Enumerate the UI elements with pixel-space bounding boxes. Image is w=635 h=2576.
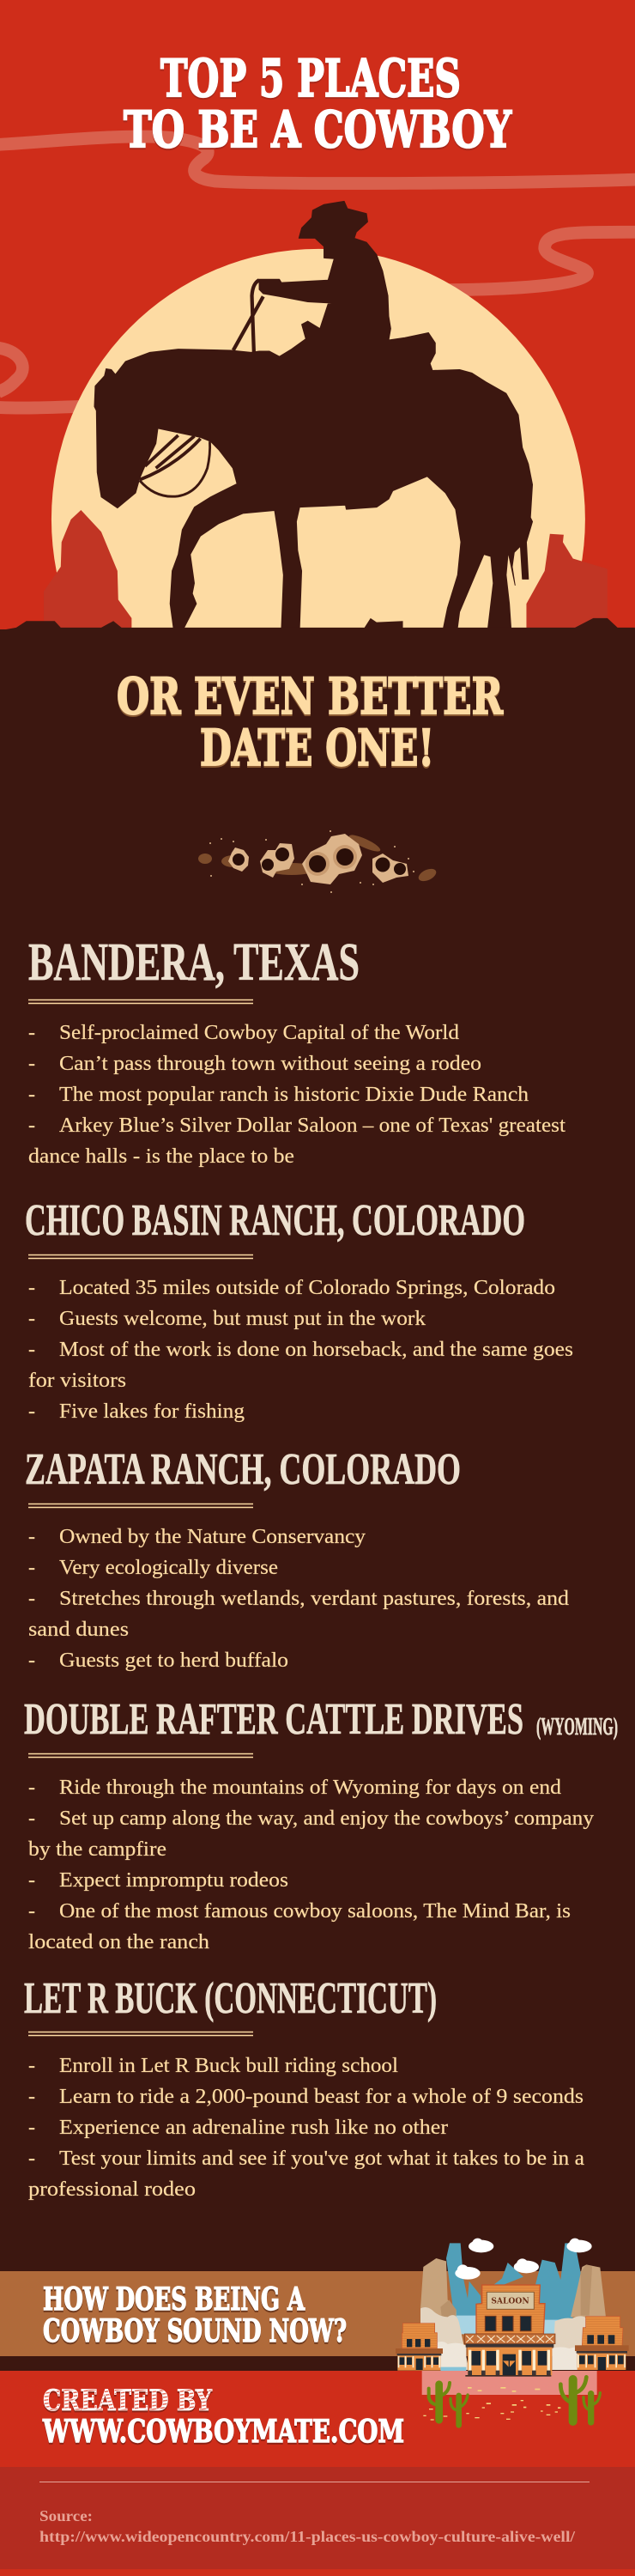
- panel: Double Rafter Cattle Drives: [24, 1695, 618, 1953]
- subheading: or even better date one: [117, 667, 504, 777]
- bullet list: -: [28, 1053, 35, 1075]
- left small saloon: [396, 2324, 443, 2371]
- heading: BANDERA, TEXAS: [28, 933, 360, 992]
- red rocks: [44, 510, 608, 629]
- panel: credit: [0, 2371, 635, 2576]
- panel: question band: [0, 2271, 635, 2356]
- source text: [39, 2507, 576, 2545]
- bullet list: Most of the work is done on horseback, and the same goes: [59, 1339, 573, 1361]
- bullet list: -: [28, 1649, 35, 1672]
- bullet list: -: [28, 1777, 35, 1799]
- band text: [43, 2281, 347, 2349]
- bullet list: -: [28, 1084, 35, 1106]
- bullet list: Arkey Blue’s Silver Dollar Saloon – one of Texas' greatest: [59, 1115, 565, 1137]
- bullet list: dance halls - is the place to be: [28, 1145, 294, 1168]
- panel: Chico Basin Ranch, Colorado: [25, 1196, 573, 1423]
- title: TOP 5 PLACES: [160, 49, 461, 109]
- source text: http://www.wideopencountry.com/11-places-us-cowboy-culture-alive-well/: [39, 2528, 576, 2545]
- bullet list: Can’t pass through town without seeing a rodeo: [59, 1053, 481, 1075]
- bullet list: -: [28, 2117, 35, 2139]
- bullet list: Set up camp along the way, and enjoy the cowboys’ company: [59, 1807, 594, 1830]
- sand specks: [423, 2387, 560, 2421]
- panel: Zapata Ranch, Colorado: [25, 1445, 569, 1672]
- brown body background: [0, 628, 635, 2371]
- bullet list: -: [28, 1115, 35, 1137]
- bullet list: Guests get to herd buffalo: [59, 1649, 288, 1672]
- bullet list: [28, 1777, 594, 1953]
- panel: sunset scene: [0, 131, 635, 629]
- bullet list: -: [28, 1022, 35, 1044]
- smoke trails: [0, 137, 635, 408]
- bullet list: -: [28, 1400, 35, 1423]
- saloon sign: SALOON: [491, 2297, 529, 2306]
- bullet list: [28, 1022, 565, 1168]
- bullet list: [28, 1526, 569, 1672]
- sun: [51, 249, 585, 628]
- bullet list: -: [28, 2086, 35, 2108]
- bullet list: [28, 1277, 573, 1423]
- bullet list: -: [28, 1339, 35, 1361]
- bullet list: Five lakes for fishing: [59, 1400, 245, 1423]
- clouds: [455, 2239, 592, 2280]
- subheading: or even better date one: DATE ONE!: [200, 719, 434, 777]
- bullet list: located on the ranch: [28, 1931, 209, 1953]
- title: [124, 49, 511, 159]
- bullet list: for visitors: [28, 1370, 126, 1392]
- bullet list: Expect impromptu rodeos: [59, 1869, 288, 1892]
- cacti: [429, 2377, 600, 2425]
- right small saloon: [575, 2317, 629, 2370]
- bullet list: -: [28, 1807, 35, 1830]
- subheading: or even better date one: OR EVEN BETTER: [117, 667, 504, 726]
- panel: source footer: [0, 2467, 635, 2569]
- bullet list: -: [28, 2055, 35, 2077]
- bullet list: Guests welcome, but must put in the work: [59, 1308, 426, 1330]
- bullet list: Located 35 miles outside of Colorado Springs, Colorado: [59, 1277, 555, 1299]
- illustration: saloon town: [396, 2239, 629, 2425]
- bullet list: -: [28, 2148, 35, 2170]
- panel: hero background: [0, 0, 635, 629]
- bullet list: Very ecologically diverse: [59, 1557, 278, 1579]
- bullet list: The most popular ranch is historic Dixie Dude Ranch: [59, 1084, 529, 1106]
- title: TO BE A COWBOY: [124, 100, 511, 159]
- bullet list: Owned by the Nature Conservancy: [59, 1526, 366, 1548]
- panel: Let R Buck: [24, 1974, 584, 2201]
- main saloon: [464, 2285, 555, 2377]
- band text: COWBOY SOUND NOW?: [43, 2313, 347, 2349]
- bullet list: Enroll in Let R Buck bull riding school: [59, 2055, 398, 2077]
- bullet list: professional rodeo: [28, 2178, 196, 2201]
- source text: Source:: [39, 2507, 93, 2524]
- bullet list: -: [28, 1900, 35, 1923]
- bullet list: [28, 2055, 584, 2201]
- bullet list: -: [28, 1869, 35, 1892]
- bullet list: -: [28, 1277, 35, 1299]
- bullet list: Stretches through wetlands, verdant pastures, forests, and: [59, 1588, 569, 1610]
- bullet list: Ride through the mountains of Wyoming for days on end: [59, 1777, 561, 1799]
- panel: Bandera, Texas: [28, 933, 565, 1168]
- band text: HOW DOES BEING A: [43, 2281, 305, 2318]
- bullet list: Test your limits and see if you've got what it takes to be in a: [59, 2148, 584, 2170]
- created by text: CREATED BY: [43, 2384, 213, 2418]
- website text: WWW.COWBOYMATE.COM: [42, 2414, 404, 2450]
- bullet list: sand dunes: [28, 1619, 129, 1641]
- bullet list: by the campfire: [28, 1838, 166, 1861]
- bullet list: -: [28, 1588, 35, 1610]
- icon: bullet holes: [198, 830, 438, 893]
- mountains: [420, 2243, 606, 2334]
- bullet list: Self-proclaimed Cowboy Capital of the World: [59, 1022, 459, 1044]
- bullet list: Learn to ride a 2,000-pound beast for a whole of 9 seconds: [59, 2086, 584, 2108]
- cowboy on horse silhouette: [94, 201, 533, 628]
- ground: [0, 618, 635, 641]
- cream cliffs: [420, 2307, 586, 2371]
- bullet list: -: [28, 1526, 35, 1548]
- bullet list: -: [28, 1557, 35, 1579]
- bullet list: -: [28, 1308, 35, 1330]
- bullet list: Experience an adrenaline rush like no other: [59, 2117, 448, 2139]
- ground patch: [422, 2371, 597, 2395]
- bullet list: One of the most famous cowboy saloons, The Mind Bar, is: [59, 1900, 571, 1923]
